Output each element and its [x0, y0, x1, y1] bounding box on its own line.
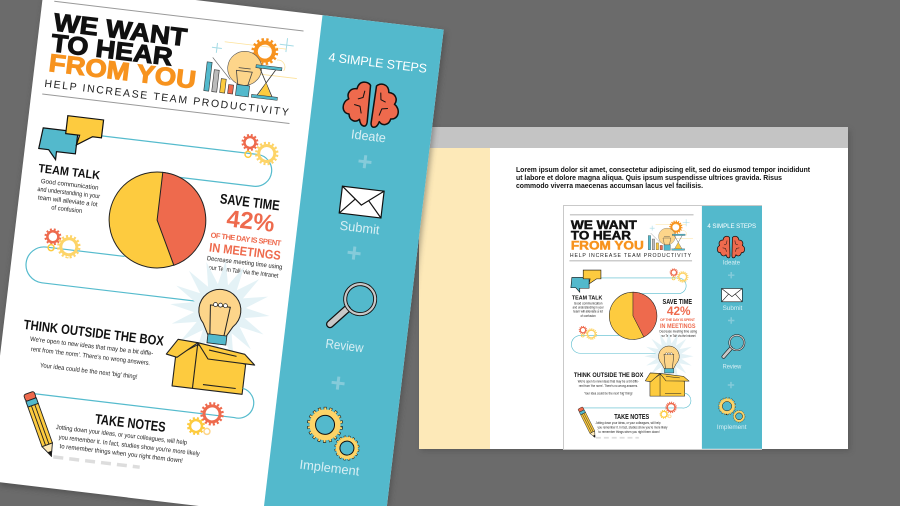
winding path 3	[35, 364, 255, 420]
label: implement: Implement	[299, 457, 361, 479]
icon: open box	[163, 338, 257, 395]
lorem text block: Lorem ipsum dolor sit amet, consectetur adipiscing elit, sed do eiusmod tempor incididunt	[516, 165, 811, 174]
text: save time: OF THE DAY IS SPENT	[210, 230, 282, 248]
large rotated poster	[0, 1, 430, 497]
icon: brain	[341, 80, 401, 130]
plus	[347, 246, 361, 260]
steps panel content: 4 SIMPLE STEPS	[328, 50, 428, 76]
icon: light bulb	[195, 287, 243, 346]
text: save time	[205, 190, 291, 280]
icon: pencil	[24, 391, 56, 458]
text: save time: IN MEETINGS	[660, 323, 695, 330]
icon: starburst	[164, 255, 275, 366]
steps panel content	[707, 223, 756, 431]
label: implement: Implement	[717, 424, 747, 431]
text: think outside the box: We're open to new ideas that may be a bit diffe-	[578, 379, 639, 383]
icon: speech bubbles	[571, 270, 601, 292]
dashed pencil line	[596, 436, 639, 439]
text: save time: our Team Talk via the Intranet	[661, 334, 696, 338]
text: save time: our Team Talk via the Intranet	[208, 264, 279, 280]
text: team talk: Good communication	[574, 301, 603, 305]
title block	[569, 215, 694, 261]
icon: gears middle	[43, 228, 81, 258]
small infographic thumbnail	[569, 206, 762, 449]
icon: open box	[645, 373, 689, 396]
text: save time: IN MEETINGS	[208, 240, 282, 263]
text: team talk	[572, 295, 604, 318]
text: think outside the box	[19, 317, 165, 383]
text: take notes: TAKE NOTES	[94, 411, 167, 435]
dashed pencil line	[53, 457, 140, 467]
steps panel content	[279, 50, 428, 481]
icon: envelope	[339, 186, 384, 218]
plus	[728, 317, 734, 324]
text: save time: Decrease meeting time using	[206, 255, 283, 271]
teal steps panel	[264, 15, 444, 506]
label: review: Review	[325, 336, 365, 355]
title block: FROM YOU	[571, 238, 644, 252]
text: save time: SAVE TIME	[219, 190, 281, 213]
icon: envelope	[722, 288, 742, 302]
text: team talk	[34, 161, 104, 217]
text: take notes: Jotting down your ideas, or your colleagues, will help	[596, 421, 661, 425]
panel: web page mockup	[419, 127, 850, 451]
poster shadow	[0, 0, 446, 506]
small poster background	[564, 206, 762, 450]
steps panel content: 4 SIMPLE STEPS	[707, 223, 756, 230]
icon: gears bottom	[660, 402, 676, 418]
icon: gears implement	[719, 398, 745, 422]
icon: speech bubbles	[38, 113, 104, 165]
title block	[42, 1, 304, 124]
icon: magnifier	[330, 281, 377, 329]
text: save time	[660, 299, 697, 338]
text: take notes: you remember it. In fact, studies show you're more likely	[597, 426, 668, 430]
icon: brain	[717, 236, 745, 258]
text: team talk: and understanding in your	[37, 186, 101, 200]
text: save time: 42%	[225, 205, 276, 238]
icon: magnifier	[724, 335, 744, 357]
text: team talk: TEAM TALK	[572, 295, 603, 301]
text: team talk: of confusion	[580, 314, 596, 318]
page body	[419, 148, 848, 449]
text: think outside the box: Your idea could be the next 'big' thing!	[40, 362, 138, 381]
text: save time: 42%	[667, 304, 691, 318]
winding path 2	[24, 245, 204, 302]
title block: HELP INCREASE TEAM PRODUCTIVITY	[570, 253, 692, 259]
browser bar	[419, 127, 848, 148]
text: team talk: Good communication	[40, 178, 99, 192]
text: save time: Decrease meeting time using	[660, 330, 697, 334]
title block: WE WANT	[571, 218, 637, 232]
icon: gears top	[670, 269, 688, 282]
icon: bulb, chart and hourglass	[648, 219, 693, 250]
plus	[331, 376, 345, 390]
title block: WE WANT	[52, 8, 188, 52]
text: think outside the box: rent from 'the norm'. There's no wrong answers.	[579, 384, 638, 388]
label: submit: Submit	[339, 218, 381, 237]
title block: TO HEAR	[50, 29, 174, 72]
pie chart 42%	[104, 167, 211, 273]
teal steps panel	[702, 206, 762, 449]
winding path 3	[583, 393, 691, 408]
title block: FROM YOU	[47, 49, 198, 95]
icon: light bulb	[659, 346, 679, 373]
yellow sidebar	[419, 148, 490, 449]
label: ideate: Ideate	[723, 260, 740, 267]
text: take notes: Jotting down your ideas, or your colleagues, will help	[55, 424, 188, 447]
lorem text block	[516, 165, 811, 190]
icon: bulb, chart and hourglass	[204, 29, 301, 102]
title block: HELP INCREASE TEAM PRODUCTIVITY	[44, 78, 289, 119]
icon: gears middle	[579, 326, 597, 339]
title block: TO HEAR	[571, 228, 631, 242]
text: team talk: team will alleviate a lot	[37, 194, 98, 208]
plus	[728, 272, 734, 278]
icon: gears top	[240, 134, 279, 165]
label: ideate: Ideate	[350, 126, 387, 145]
text: take notes: to remember things when you right them down!	[598, 430, 660, 434]
winding path 1	[601, 278, 686, 294]
text: save time: OF THE DAY IS SPENT	[660, 318, 696, 322]
plus	[728, 382, 734, 388]
text: team talk: TEAM TALK	[38, 161, 101, 182]
text: think outside the box: rent from 'the norm'. There's no wrong answers.	[30, 346, 151, 367]
label: review: Review	[723, 364, 742, 371]
lorem text block: commodo viverra maecenas accumsan lacus vel facilisis.	[516, 181, 703, 190]
icon: gears bottom	[187, 401, 224, 437]
poster sheet	[0, 0, 444, 506]
lorem text block: ut labore et dolore magna aliqua. Quis ipsum suspendisse ultrices gravida. Risus	[516, 173, 782, 182]
text: think outside the box	[574, 372, 644, 396]
text: team talk: of confusion	[51, 204, 83, 215]
icon: starburst	[644, 332, 694, 381]
icon: gears implement	[305, 407, 362, 460]
winding path 1	[98, 136, 273, 188]
label: submit: Submit	[723, 305, 743, 312]
text: think outside the box: THINK OUTSIDE THE BOX	[23, 317, 165, 349]
pie chart 42%	[609, 292, 657, 339]
text: team talk: and understanding in your	[573, 306, 604, 310]
text: take notes: TAKE NOTES	[614, 414, 650, 421]
text: take notes	[596, 414, 668, 434]
text: take notes: to remember things when you right them down!	[59, 443, 183, 465]
text: team talk: team will alleviate a lot	[573, 310, 603, 314]
text: take notes	[53, 406, 204, 467]
icon: pencil	[578, 407, 597, 439]
winding path 2	[571, 336, 659, 353]
text: save time: SAVE TIME	[663, 299, 692, 306]
text: think outside the box: Your idea could be the next 'big' thing!	[584, 392, 633, 396]
text: think outside the box: THINK OUTSIDE THE BOX	[574, 372, 644, 379]
plus	[358, 154, 372, 169]
text: think outside the box: We're open to new ideas that may be a bit diffe-	[30, 336, 154, 357]
text: take notes: you remember it. In fact, studies show you're more likely	[58, 434, 201, 458]
